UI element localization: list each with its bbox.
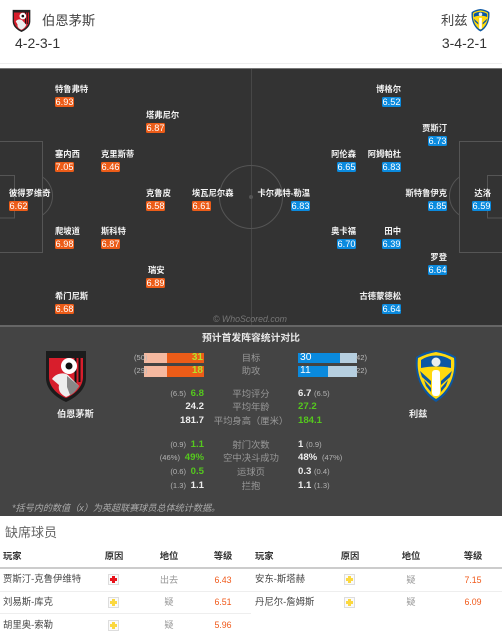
player: 塞内西 (55, 149, 80, 172)
player: 斯特鲁伊克: 6.85 (429, 201, 446, 211)
player: 埃瓦尼尔森 (192, 188, 234, 211)
table: missing players left (3, 550, 232, 631)
player: 埃瓦尼尔森: 埃瓦尼尔森 (192, 188, 234, 198)
player: 特鲁弗特: 6.93 (56, 97, 73, 107)
icon: Bournemouth crest small (12, 10, 30, 32)
table: missing players left: 6.51 (214, 597, 232, 607)
panel: pitch (0, 68, 502, 325)
player: 阿姆帕杜: 6.83 (383, 162, 400, 172)
player: 博格尔: 6.52 (383, 97, 400, 107)
player: 克鲁皮: 克鲁皮 (146, 188, 171, 198)
player: 塔弗尼尔: 塔弗尼尔 (146, 110, 179, 120)
player: 希门尼斯: 希门尼斯 (55, 291, 88, 301)
player: 希门尼斯: 6.68 (56, 304, 73, 314)
player: 达洛 (472, 188, 491, 211)
player: 特鲁弗特: 特鲁弗特 (55, 84, 88, 94)
player: 瑞安: 瑞安 (148, 265, 165, 275)
stat labels: 空中决斗成功 (223, 453, 279, 463)
stat labels: 运球页 (237, 467, 265, 477)
bar: home assists: (29) (134, 366, 148, 375)
away team name: 利兹 (441, 13, 468, 28)
player: 克鲁皮 (146, 188, 171, 211)
table: missing players left: 出去 (160, 575, 178, 585)
table: missing players right: 6.09 (464, 597, 482, 607)
player: 斯科特: 斯科特 (101, 226, 126, 236)
away stat values (298, 388, 342, 491)
home stat values: 1.1 (191, 439, 204, 450)
bar: away assists: 11 (300, 365, 311, 376)
player: 田中 (382, 226, 401, 249)
player: 古德蒙德松: 古德蒙德松 (360, 291, 401, 301)
player: 罗登: 6.64 (429, 265, 446, 275)
table: missing players right: 疑 (406, 597, 416, 607)
player: 古德蒙德松 (360, 291, 401, 314)
player: 克里斯蒂 (101, 149, 134, 172)
home formation: 4-2-3-1 (15, 35, 60, 51)
home season averages: (6.5) (170, 389, 186, 398)
icon: Leeds crest small (472, 9, 490, 32)
table: missing players left: 等级 (214, 551, 232, 561)
footnote: *括号内的数值（x）为英超联赛球员总体统计数据。 (12, 503, 220, 513)
player: 彼得罗维奇: 彼得罗维奇 (9, 188, 50, 198)
table: missing players right: 7.15 (464, 575, 482, 585)
player: 瑞安: 6.89 (147, 278, 164, 288)
icon: Bournemouth crest large (46, 351, 86, 402)
bar: home assists: 18 (192, 365, 203, 376)
home stat values: 6.8 (191, 388, 204, 399)
panel: lineup statistics comparison (0, 325, 502, 516)
player: 特鲁弗特 (55, 84, 88, 107)
player: 塔弗尼尔: 6.87 (147, 123, 164, 133)
player: 阿姆帕杜: 阿姆帕杜 (368, 149, 401, 159)
bar: away goals: 30 (300, 352, 311, 363)
player: 奥卡福 (331, 226, 356, 249)
stats title: 预计首发阵容统计对比 (202, 333, 300, 344)
home team label: 伯恩茅斯 (57, 409, 94, 419)
home stat values: 49% (185, 452, 204, 463)
player: 斯特鲁伊克 (406, 188, 447, 211)
home season averages: (0.9) (170, 440, 186, 449)
player: 瑞安 (146, 265, 165, 288)
table: missing players left: 刘易斯-库克 (3, 596, 53, 607)
watermark: © WhoScored.com (213, 314, 287, 324)
away stat values: 1 (0.9) (298, 439, 322, 450)
bar: away goals: 42) (356, 353, 367, 362)
player: 田中: 田中 (384, 226, 401, 236)
home stat values: 181.7 (180, 415, 204, 426)
away stat values: 184.1 (298, 415, 322, 426)
stat labels: 射门次数 (232, 440, 270, 450)
stat labels: 平均身高（厘米） (214, 416, 288, 426)
player: 斯科特 (101, 226, 126, 249)
away stat values: 0.3 (0.4) (298, 466, 330, 477)
away stat values: 27.2 (298, 401, 317, 412)
home stat values: 0.5 (191, 466, 204, 477)
bar: home goals: (50) (134, 353, 148, 362)
stat labels: 平均年龄 (232, 402, 270, 412)
away team label: 利兹 (409, 409, 427, 419)
player: 克里斯蒂: 6.46 (102, 162, 119, 172)
player: 博格尔 (376, 84, 401, 107)
player: 彼得罗维奇 (9, 188, 50, 211)
table: missing players right: 原因 (341, 551, 359, 561)
player: 田中: 6.39 (383, 239, 400, 249)
home stat values (180, 388, 204, 491)
away stat values: 1.1 (1.3) (298, 480, 330, 491)
player: 克鲁皮: 6.58 (147, 201, 164, 211)
player: 博格尔: 博格尔 (376, 84, 401, 94)
player: 卡尔弗特-勒温: 6.83 (292, 201, 309, 211)
table: missing players right: 玩家 (255, 551, 274, 561)
player: 阿姆帕杜 (368, 149, 401, 172)
away stat values: 48% (47%) (298, 452, 342, 463)
player: 阿伦森: 阿伦森 (331, 149, 356, 159)
player: 爬坡道: 6.98 (56, 239, 73, 249)
player: 奥卡福: 奥卡福 (331, 226, 356, 236)
table: missing players left: 贾斯汀-克鲁伊维特 (3, 573, 81, 584)
player: 古德蒙德松: 6.64 (383, 304, 400, 314)
home season averages (160, 389, 186, 490)
bar: away assists (298, 365, 367, 377)
bar: away assists: 22) (356, 366, 367, 375)
table: missing players right: 安东-斯塔赫 (255, 573, 305, 584)
heading: missing players: 缺席球员 (5, 525, 57, 540)
stat labels: 目标 (242, 353, 260, 363)
player: 克里斯蒂: 克里斯蒂 (101, 149, 134, 159)
player: 达洛: 6.59 (473, 201, 490, 211)
icon: Leeds crest large (416, 350, 456, 402)
away stat values: 6.7 (6.5) (298, 388, 330, 399)
table: missing players right: 地位 (402, 551, 420, 561)
player: 斯特鲁伊克: 斯特鲁伊克 (406, 188, 447, 198)
bar: home goals (134, 352, 204, 363)
bar: home assists (134, 365, 204, 377)
player: 塞内西: 7.05 (56, 162, 73, 172)
away formation: 3-4-2-1 (442, 35, 487, 51)
pitch markings (0, 69, 502, 325)
stat labels: 助攻 (242, 366, 260, 376)
player: 塞内西: 塞内西 (55, 149, 80, 159)
player: 奥卡福: 6.70 (338, 239, 355, 249)
player: 塔弗尼尔 (146, 110, 179, 133)
home season averages: (0.6) (170, 467, 186, 476)
bar: home goals: 31 (192, 352, 203, 363)
player: 罗登: 罗登 (430, 252, 447, 262)
table: missing players left: 疑 (164, 597, 174, 607)
player: 彼得罗维奇: 6.62 (10, 201, 27, 211)
table: missing players right: 丹尼尔-詹姆斯 (255, 596, 314, 607)
home season averages: (1.3) (170, 481, 186, 490)
player: 希门尼斯 (55, 291, 88, 314)
player: 贾斯汀 (422, 123, 447, 146)
player: 阿伦森 (331, 149, 356, 172)
home stat values: 24.2 (185, 401, 204, 412)
player: 卡尔弗特-勒温 (257, 188, 310, 211)
player: 卡尔弗特-勒温: 卡尔弗特-勒温 (257, 188, 310, 198)
home team name: 伯恩茅斯 (42, 13, 95, 28)
home season averages: (46%) (160, 453, 180, 462)
table: missing players left: 疑 (164, 620, 174, 630)
table: missing players left: 胡里奥-索勒 (3, 619, 53, 630)
player: 埃瓦尼尔森: 6.61 (193, 201, 210, 211)
player: 贾斯汀: 6.73 (429, 136, 446, 146)
player: 斯科特: 6.87 (102, 239, 119, 249)
header: match teams and formations (0, 0, 502, 68)
player: 爬坡道 (55, 226, 80, 249)
table: missing players left: 6.43 (214, 575, 232, 585)
player: 贾斯汀: 贾斯汀 (422, 123, 447, 133)
player: 达洛: 达洛 (474, 188, 491, 198)
player: 罗登 (428, 252, 447, 275)
home stat values: 1.1 (191, 480, 204, 491)
table: missing players left: 玩家 (3, 551, 22, 561)
table: missing players right: 疑 (406, 575, 416, 585)
stat labels (214, 353, 288, 491)
table: missing players right: 等级 (464, 551, 482, 561)
stat labels: 平均评分 (232, 389, 270, 399)
table: missing players right (255, 550, 482, 608)
stat labels: 拦抱 (242, 481, 260, 491)
table: missing players left: 5.96 (214, 620, 232, 630)
table: missing players left: 原因 (105, 551, 123, 561)
bar: away goals (298, 352, 367, 363)
player: 爬坡道: 爬坡道 (55, 226, 80, 236)
table: missing players left: 地位 (160, 551, 178, 561)
player: 阿伦森: 6.65 (338, 162, 355, 172)
